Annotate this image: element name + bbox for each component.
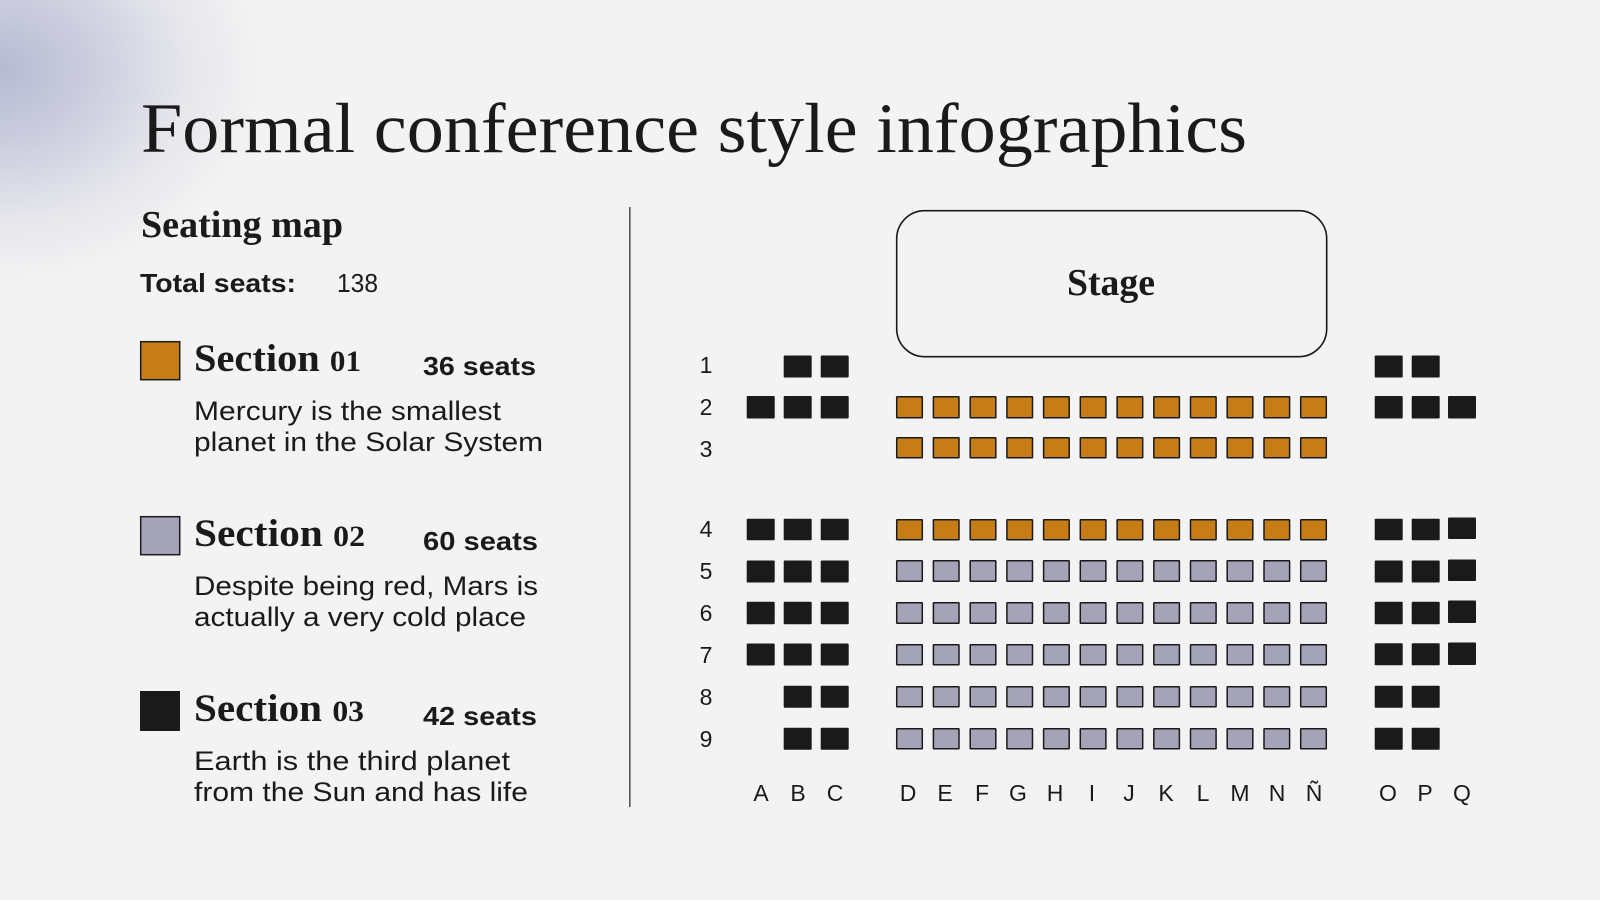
total seats — [140, 268, 378, 298]
seats: section 01 (orange) — [897, 397, 1326, 540]
seats: section 02 (grey) — [897, 561, 1326, 749]
column labels: B — [790, 780, 806, 806]
title: Formal conference style infographics — [141, 90, 1247, 168]
row labels: 1 — [700, 352, 712, 378]
column labels: K — [1158, 780, 1174, 806]
legend: section 03: Earth is the third planet — [194, 746, 511, 776]
column labels: I — [1089, 780, 1095, 806]
row labels: 8 — [700, 684, 712, 710]
column labels: P — [1417, 780, 1433, 806]
legend: section 01 — [141, 337, 543, 457]
column labels: L — [1197, 780, 1210, 806]
legend: section 01: Mercury is the smallest — [194, 396, 502, 426]
column labels: Q — [1453, 780, 1471, 806]
column labels: N — [1269, 780, 1285, 806]
seats: section 03 left block (black) — [747, 356, 849, 750]
legend: section 02: actually a very cold place — [194, 602, 526, 632]
column labels: M — [1230, 780, 1250, 806]
column labels: H — [1047, 780, 1063, 806]
stage — [897, 211, 1327, 357]
column labels: E — [937, 780, 953, 806]
row labels — [700, 352, 713, 752]
column labels: A — [753, 780, 769, 806]
column labels: C — [827, 780, 843, 806]
column labels: Ñ — [1306, 780, 1322, 806]
legend: section 03: Section 03 — [194, 687, 364, 730]
legend: section 03: from the Sun and has life — [194, 777, 528, 807]
heading: seating map: Seating map — [141, 204, 343, 246]
row labels: 2 — [700, 394, 712, 420]
column labels: F — [975, 780, 989, 806]
column labels — [753, 780, 1471, 806]
legend: section 01: Section 01 — [194, 337, 361, 380]
legend: section 02: Despite being red, Mars is — [194, 571, 538, 601]
legend: section 02: Section 02 — [194, 512, 365, 555]
stage: Stage — [1067, 262, 1155, 304]
row labels: 3 — [700, 436, 712, 462]
legend: section 02: 60 seats — [423, 526, 538, 556]
panel: seating map legend — [140, 204, 543, 807]
legend: section 03: 42 seats — [423, 701, 537, 731]
row labels: 4 — [700, 516, 713, 542]
legend: section 01: planet in the Solar System — [194, 427, 543, 457]
row labels: 6 — [700, 600, 712, 626]
total seats: 138 — [337, 268, 378, 298]
column labels: G — [1009, 780, 1027, 806]
total seats: Total seats: — [140, 268, 296, 298]
row labels: 5 — [700, 558, 712, 584]
row labels: 9 — [700, 726, 712, 752]
column labels: D — [900, 780, 916, 806]
seats: section 03 right block (black) — [1375, 356, 1476, 750]
column labels: J — [1123, 780, 1135, 806]
legend: section 01: 36 seats — [423, 351, 536, 381]
legend: section 03 — [140, 687, 537, 807]
legend: section 02 — [141, 512, 538, 632]
row labels: 7 — [700, 642, 712, 668]
column labels: O — [1379, 780, 1397, 806]
